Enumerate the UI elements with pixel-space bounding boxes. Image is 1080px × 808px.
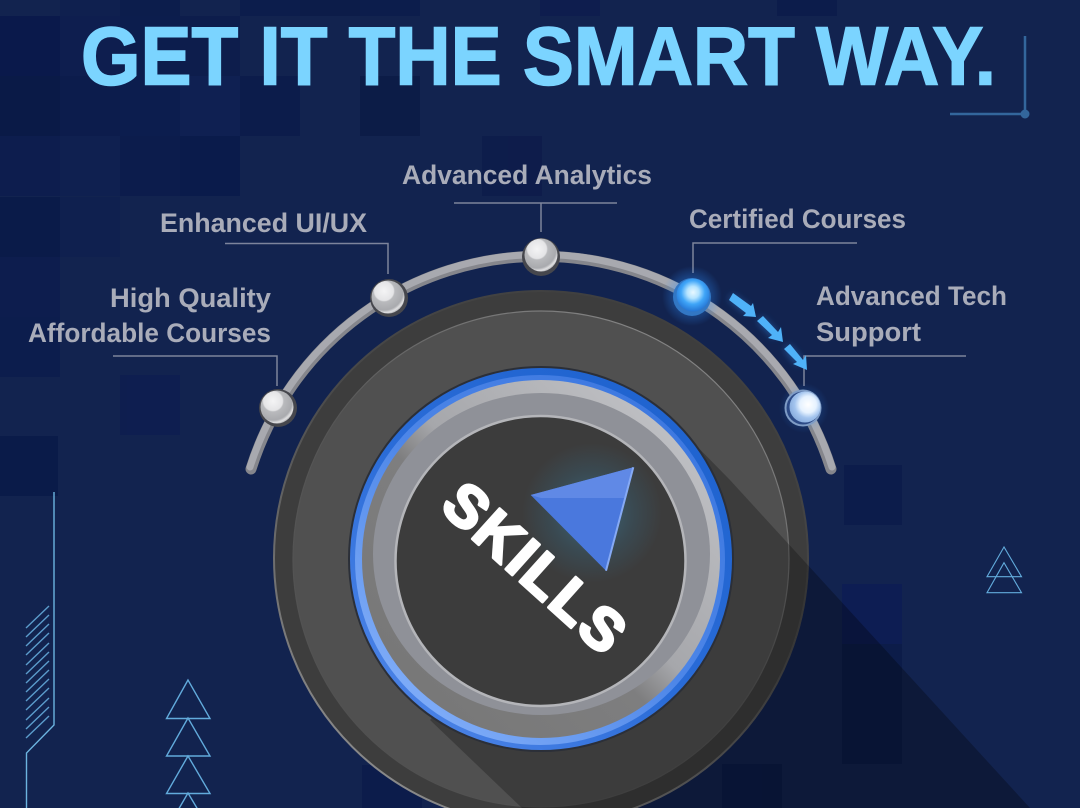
connector lines: [113, 203, 966, 386]
label: certified courses: Certified Courses: [689, 204, 906, 234]
decorative triangles bottom left: [166, 680, 210, 808]
stop: advanced tech support: [779, 383, 829, 433]
inner dial face: [396, 416, 686, 706]
title: GET IT THE SMART WAY.: [81, 10, 996, 102]
label: advanced tech support: [816, 281, 1007, 347]
stop: certified courses active: [662, 266, 722, 326]
arrows: [729, 293, 807, 370]
blue ring: [348, 366, 734, 752]
label: high quality affordable courses: [28, 283, 271, 348]
corner bracket accent: [950, 36, 1028, 118]
shadow across knob: [430, 450, 809, 808]
label: enhanced ui/ux: Enhanced UI/UX: [160, 208, 367, 238]
label: high quality affordable courses: Affordable Courses: [28, 318, 271, 348]
pointer triangle: [522, 443, 662, 583]
label: advanced tech support: Advanced Tech: [816, 281, 1007, 311]
outer knob ring: [274, 291, 808, 808]
inner knob plate: [293, 311, 789, 807]
label: advanced tech support: Support: [816, 317, 921, 347]
knob: [273, 290, 809, 808]
grey ring: [362, 380, 720, 738]
decorative circuit line with hatching: [26, 492, 54, 808]
stop: enhanced ui/ux: [370, 279, 408, 317]
dial label: SKILLS: [430, 469, 639, 667]
long shadow on background: [430, 425, 1030, 808]
label: advanced analytics: Advanced Analytics: [402, 160, 652, 190]
stop: advanced analytics: [522, 238, 560, 276]
decorative triangles right: [987, 547, 1022, 593]
dial arc: [250, 255, 832, 469]
stop: high quality: [259, 389, 297, 427]
label: high quality affordable courses: High Quality: [110, 283, 271, 313]
